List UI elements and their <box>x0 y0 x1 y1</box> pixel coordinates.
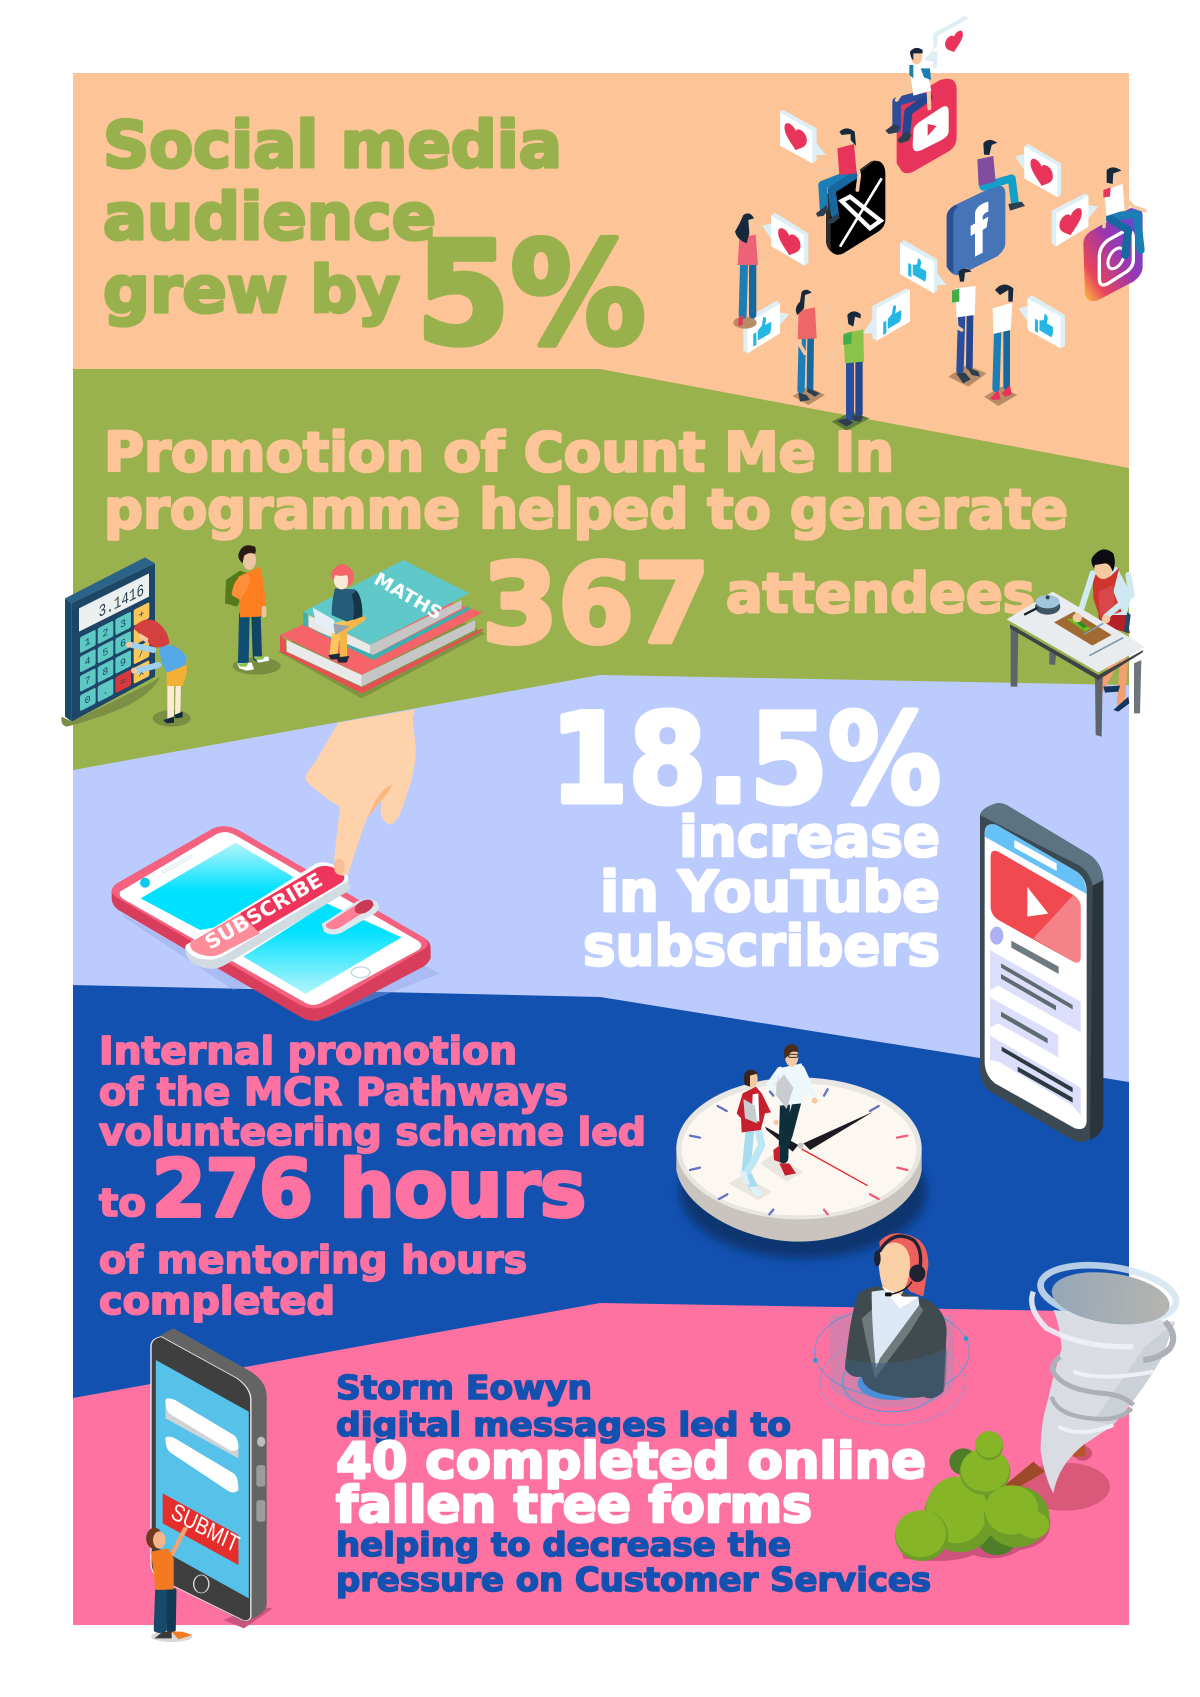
figure: woman in white <box>977 285 1017 406</box>
icon: facebook tile <box>947 186 1005 275</box>
heading: social media audience: 5% <box>416 212 646 377</box>
panel: social media background <box>73 73 1129 473</box>
icon: subscribe button: SUBSCRIBE <box>200 868 327 954</box>
heading: social media audience: audience <box>103 181 436 255</box>
illustration: subscribe phone and pointing hand <box>112 709 440 1022</box>
illustration: social media people and app icons <box>733 16 1145 431</box>
icon: phone body <box>980 803 1103 1142</box>
figure: man sitting on facebook <box>977 140 1025 211</box>
illustration: woman cooking at table <box>1007 549 1145 737</box>
text block: storm eowyn: pressure on Customer Services <box>336 1560 931 1599</box>
icon: x tile <box>826 161 885 255</box>
text block: storm eowyn <box>336 1368 931 1599</box>
icon: heart bubble right <box>1015 144 1061 197</box>
icon: thumb bubble centre <box>900 240 947 293</box>
figure: woman sitting on instagram <box>1103 167 1145 255</box>
figure: girl with laptop <box>313 564 363 663</box>
panel: youtube background <box>73 675 1129 1090</box>
icon: calculator: 8 <box>102 665 108 680</box>
icon: calculator: 3.1416 <box>99 581 144 623</box>
icon: calculator: 2 <box>102 627 108 641</box>
icon: phone shadow <box>122 913 440 1022</box>
illustration: submit phone with man <box>146 1328 273 1642</box>
heading: count me in: 367 <box>482 540 710 668</box>
heading: count me in: programme helped to generate <box>104 478 1068 541</box>
illustration: youtube phone <box>980 803 1103 1142</box>
icon: calculator: 7 <box>85 674 91 689</box>
icon: heart bubble left top <box>780 110 826 163</box>
heading: count me in <box>104 421 1068 668</box>
icon: calculator: + <box>138 608 144 623</box>
icon: instagram tile <box>1083 207 1143 301</box>
icon: calculator: 3 <box>120 618 126 632</box>
figure: man sitting on youtube <box>885 48 931 143</box>
panel: count me in background <box>73 369 1129 775</box>
icon: calculator: 0 <box>85 694 91 708</box>
text block: mcr pathways: Internal promotion <box>99 1029 517 1073</box>
icon: pan and board <box>1025 595 1123 656</box>
figure: woman in coral <box>793 290 831 405</box>
figure: man with tablet <box>760 1044 818 1182</box>
icon: calculator: 1 <box>85 636 91 650</box>
heading: social media audience <box>103 109 646 377</box>
icon: thumb bubble right <box>1018 295 1065 348</box>
icon: calculator: . <box>102 685 108 699</box>
text block: mcr pathways: 276 hours <box>152 1145 586 1235</box>
illustration: calculator, student and books <box>61 545 485 727</box>
icon: youtube tile <box>897 79 957 173</box>
text block: youtube subscribers: increase <box>679 805 940 870</box>
icon: books stack: MATHS <box>370 569 446 624</box>
heading: count me in: attendees <box>726 562 1035 625</box>
text block: storm eowyn: 40 completed online <box>336 1432 926 1490</box>
icon: video player <box>991 851 1081 963</box>
figure: man in white <box>948 268 990 387</box>
heading: count me in: Promotion of Count Me In <box>104 421 894 484</box>
icon: table <box>1007 592 1145 737</box>
text block: mcr pathways: to <box>99 1181 146 1225</box>
text block: youtube subscribers: in YouTube <box>600 860 940 925</box>
heading: social media audience: Social media <box>103 109 562 183</box>
panel: mcr pathways background <box>73 985 1129 1400</box>
icon: calculator: x <box>138 666 144 681</box>
icon: clock <box>676 1077 927 1258</box>
icon: subscribe phone <box>112 826 431 1021</box>
icon: heart bubble left <box>762 213 808 266</box>
text block: mcr pathways: of the MCR Pathways <box>99 1070 568 1114</box>
heading: social media audience: grew by <box>103 254 400 328</box>
figure: cook <box>1079 549 1132 712</box>
icon: calculator: 6 <box>120 637 126 651</box>
icon: pointing hand <box>306 709 416 875</box>
icon: calculator: 9 <box>120 656 126 671</box>
icon: books stack <box>278 560 485 698</box>
icon: subscribe button <box>185 862 350 969</box>
text block: storm eowyn: helping to decrease the <box>336 1525 791 1564</box>
text block: mcr pathways: volunteering scheme led <box>99 1110 646 1154</box>
icon: submit phone: SUBMIT <box>168 1498 243 1558</box>
icon: tornado <box>1032 1257 1180 1493</box>
figure: man tapping submit <box>146 1528 192 1642</box>
text block: storm eowyn: Storm Eowyn <box>336 1368 592 1407</box>
figure: man in green <box>823 311 869 431</box>
icon: comments <box>990 927 1081 1115</box>
illustration: customer services agent, bush and tornado <box>813 1233 1180 1561</box>
text block: storm eowyn: fallen tree forms <box>336 1476 812 1534</box>
panel: storm eowyn background <box>73 1303 1129 1625</box>
figure: woman with tablet <box>728 1070 779 1200</box>
icon: calculator: / <box>138 647 144 661</box>
icon: heart bubble top <box>924 16 969 69</box>
icon: calculator: = <box>120 676 126 690</box>
figure: woman at calculator <box>126 619 191 727</box>
text block: youtube subscribers: subscribers <box>583 914 940 979</box>
icon: heart bubble far right <box>1052 193 1098 247</box>
text block: youtube subscribers: 18.5% <box>550 688 941 832</box>
text block: youtube subscribers <box>550 688 941 979</box>
icon: calculator: 5 <box>102 646 108 660</box>
text block: storm eowyn: digital messages led to <box>336 1405 791 1444</box>
figure: student with backpack <box>225 545 281 675</box>
text block: mcr pathways: completed <box>99 1279 335 1323</box>
icon: thumb bubble lower left <box>743 301 789 353</box>
icon: thumb bubble lower <box>863 288 910 341</box>
figure: woman sitting on x <box>816 128 859 224</box>
icon: submit phone <box>151 1328 273 1628</box>
figure: woman standing left <box>733 213 768 329</box>
icon: fallen tree bush <box>895 1431 1110 1561</box>
icon: calculator <box>61 557 160 727</box>
figure: customer service agent <box>813 1233 969 1425</box>
text block: mcr pathways: of mentoring hours <box>99 1238 527 1282</box>
illustration: clock with two people <box>676 1044 927 1258</box>
text block: mcr pathways <box>99 1029 646 1323</box>
icon: calculator: 4 <box>85 655 91 669</box>
icon: toggle <box>322 897 379 934</box>
